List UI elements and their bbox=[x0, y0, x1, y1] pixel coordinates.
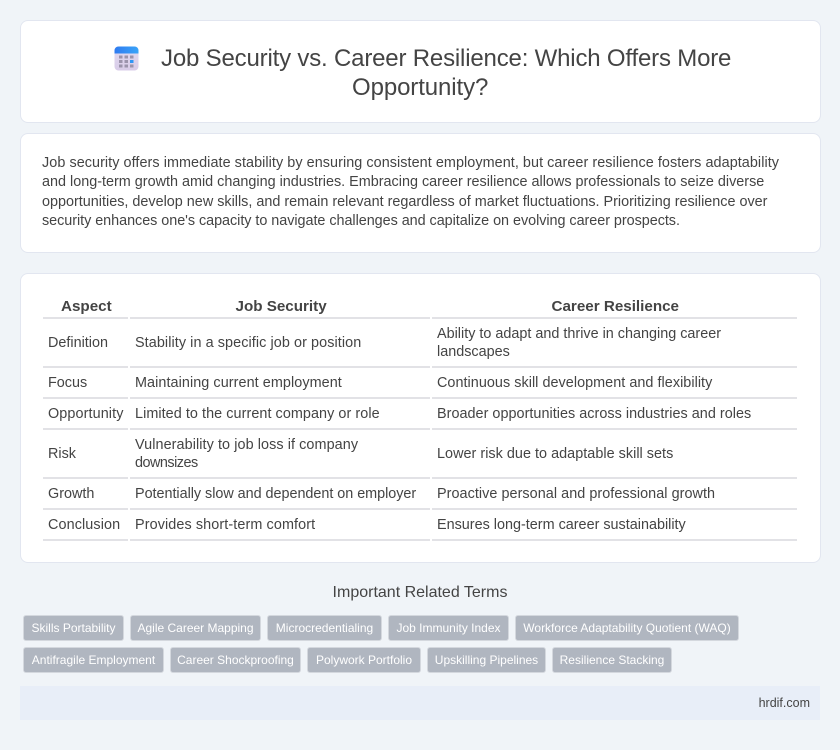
row: definition: Ability to adapt and thrive in changing career bbox=[437, 326, 721, 342]
row: focus: Focus bbox=[48, 375, 87, 391]
intro paragraph bbox=[42, 155, 779, 229]
row: definition bbox=[43, 326, 797, 368]
chip: Upskilling Pipelines bbox=[435, 653, 538, 667]
related terms heading: Important Related Terms bbox=[333, 584, 507, 601]
row: opportunity bbox=[43, 406, 797, 430]
row: focus bbox=[43, 375, 797, 399]
chip bbox=[23, 647, 164, 673]
intro paragraph: security enhances one's capacity to navigate challenges and capitalize on evolving career prospects. bbox=[42, 213, 680, 229]
row: growth: Potentially slow and dependent on employer bbox=[135, 486, 416, 502]
table header row bbox=[43, 298, 797, 319]
row: risk: Lower risk due to adaptable skill sets bbox=[437, 446, 673, 462]
table header row: Career Resilience bbox=[552, 298, 679, 315]
chip bbox=[427, 647, 546, 673]
row: focus: Maintaining current employment bbox=[135, 375, 342, 391]
title: Job Security vs. Career Resilience: Which Offers More bbox=[161, 45, 731, 72]
chip bbox=[130, 615, 261, 641]
row: growth: Growth bbox=[48, 486, 94, 502]
row: risk: Vulnerability to job loss if company bbox=[135, 437, 358, 453]
row: risk: Risk bbox=[48, 446, 76, 462]
title bbox=[161, 45, 731, 101]
chip bbox=[23, 615, 124, 641]
chip: Antifragile Employment bbox=[32, 653, 155, 667]
header card bbox=[20, 20, 821, 123]
chip: Microcredentialing bbox=[276, 621, 373, 635]
related terms chips bbox=[23, 615, 739, 673]
chip bbox=[515, 615, 739, 641]
row: definition: Definition bbox=[48, 335, 108, 351]
title: Opportunity? bbox=[352, 74, 488, 101]
row: risk: downsizes bbox=[135, 455, 198, 471]
intro card bbox=[20, 133, 821, 253]
row: opportunity: Broader opportunities across industries and roles bbox=[437, 406, 751, 422]
table header row: Job Security bbox=[236, 298, 327, 315]
row: growth bbox=[43, 486, 797, 510]
chip bbox=[267, 615, 382, 641]
chip bbox=[170, 647, 301, 673]
intro paragraph: Job security offers immediate stability by ensuring consistent employment, but career resilience fosters adaptability bbox=[42, 155, 779, 171]
row: opportunity: Limited to the current company or role bbox=[135, 406, 380, 422]
chip bbox=[552, 647, 672, 673]
row: conclusion bbox=[43, 517, 797, 541]
icon: calendar bbox=[114, 46, 138, 70]
row: focus: Continuous skill development and flexibility bbox=[437, 375, 712, 391]
intro paragraph: and long-term growth amid changing industries. Embracing career resilience allows professionals to seize diverse bbox=[42, 174, 764, 190]
table header row: Aspect bbox=[61, 298, 112, 315]
comparison table bbox=[43, 298, 797, 541]
comparison table card bbox=[20, 273, 821, 563]
chip: Job Immunity Index bbox=[396, 621, 501, 635]
chip: Workforce Adaptability Quotient (WAQ) bbox=[523, 621, 731, 635]
chip: Skills Portability bbox=[31, 621, 116, 635]
row: growth: Proactive personal and professional growth bbox=[437, 486, 715, 502]
intro paragraph: opportunities, develop new skills, and remain relevant regardless of market fluctuations. Prioritizing resilience over bbox=[42, 194, 767, 210]
row: conclusion: Conclusion bbox=[48, 517, 120, 533]
row: definition: Stability in a specific job or position bbox=[135, 335, 361, 351]
chip: Polywork Portfolio bbox=[316, 653, 412, 667]
row: definition: landscapes bbox=[437, 344, 510, 360]
row: conclusion: Provides short-term comfort bbox=[135, 517, 315, 533]
chip bbox=[388, 615, 509, 641]
chip bbox=[307, 647, 421, 673]
footer bbox=[20, 686, 820, 720]
row: conclusion: Ensures long-term career sustainability bbox=[437, 517, 686, 533]
row: risk bbox=[43, 437, 797, 479]
row: opportunity: Opportunity bbox=[48, 406, 124, 422]
chip: Agile Career Mapping bbox=[137, 621, 254, 635]
chip: Resilience Stacking bbox=[560, 653, 664, 667]
footer source: hrdif.com bbox=[759, 696, 810, 710]
chip: Career Shockproofing bbox=[177, 653, 294, 667]
